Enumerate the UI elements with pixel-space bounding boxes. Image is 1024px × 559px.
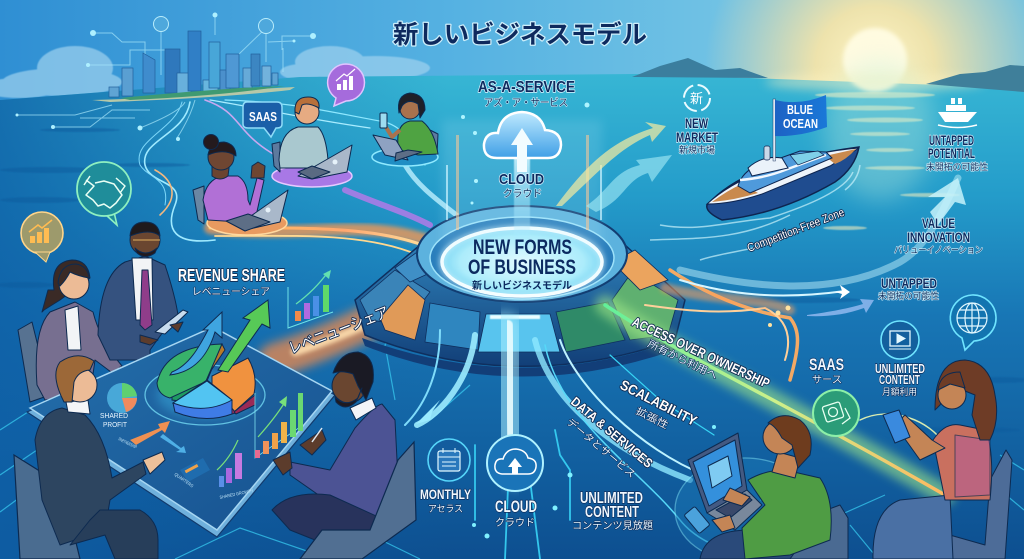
bubble: purple chart icon (328, 64, 364, 106)
label: value innovation: バリューイノベーション (894, 245, 983, 255)
table chart: small bars centre: SHARED GROWTH (219, 488, 253, 500)
person: woman in purple with laptop (193, 134, 288, 235)
blue flows downward (405, 325, 745, 559)
label: revenue share: レベニューシェア (192, 286, 270, 298)
flag: blue ocean (773, 95, 827, 161)
rotated label: data and services: DATA & SERVICES (568, 394, 656, 471)
rotated label: scalability: 拡張性 (634, 404, 671, 432)
arrows rising to new market (556, 122, 672, 212)
table chart: bars right (255, 393, 303, 458)
bubble: growth chart icon, orange (21, 212, 63, 262)
label: untapped: UNTAPPED (881, 275, 937, 291)
label: new market: 新規市場 (679, 144, 715, 155)
flag: blue ocean: BLUE (787, 102, 813, 117)
bubble: handshake icon (77, 162, 131, 225)
icon: new market: 新 (690, 91, 703, 106)
label: rotated revenue share jp: レベニューシェア (286, 304, 391, 358)
title: 新しいビジネスモデル (393, 20, 647, 49)
clouds (0, 46, 430, 98)
label: saas: サース (812, 374, 842, 386)
label: value innovation: INNOVATION (907, 229, 970, 245)
table arrows: PARTNERSHIP (118, 436, 138, 450)
label: unlimited content bottom: UNLIMITED (580, 490, 643, 507)
arrows: value innovation (807, 178, 966, 316)
label: cloud bottom: CLOUD (495, 497, 537, 516)
label: new market (676, 115, 718, 155)
label: untapped (878, 275, 939, 301)
label: new market: NEW (685, 115, 709, 131)
arrow: downward left (416, 400, 440, 424)
label: new market: MARKET (676, 129, 718, 145)
woman with phone in chair (873, 360, 1012, 559)
city island (16, 12, 316, 141)
label: cloud top: クラウド (503, 188, 542, 200)
person: man in sweater with laptop (272, 97, 352, 187)
table chart: small bars centre: QUARTERS (173, 472, 194, 488)
label: untapped: 未開拓の可能性 (878, 290, 939, 301)
label: saas: SAAS (809, 355, 844, 374)
man in green shirt with laptop (684, 416, 848, 559)
network lines (17, 15, 313, 138)
chart: rising bars near revenue share (288, 270, 333, 328)
label: untapped potential: POTENTIAL (928, 145, 975, 161)
man at front left (35, 356, 165, 559)
outer ring (417, 206, 627, 302)
orange stream: revenue share (155, 170, 445, 360)
chair and woman in grey jacket (18, 260, 138, 402)
heading: as-a-service: AS-A-SERVICE (478, 79, 575, 96)
rotated label: access over ownership: ACCESS OVER OWNERSHIP (630, 314, 772, 391)
sun (843, 28, 907, 92)
label: monthly access: アセラス (428, 504, 463, 515)
label: value innovation: VALUE (922, 215, 955, 231)
platform centre label: 新しいビジネスモデル (472, 279, 572, 292)
icon: globe bubble (950, 295, 996, 350)
icon: saas gear badge (813, 390, 859, 436)
table chart: small bars centre (173, 440, 253, 500)
label: unlimited content bottom: CONTENT (585, 504, 639, 521)
icon: cloud upload badge (487, 435, 543, 491)
label: unlimited content, monthly (875, 361, 925, 397)
icon: video bubble (881, 321, 919, 359)
flag: blue ocean: OCEAN (783, 116, 818, 131)
central platform (355, 206, 685, 377)
heading: as-a-service: アズ・ア・サービス (484, 96, 568, 109)
label: monthly access: MONTHLY (420, 486, 471, 502)
table arrows (118, 421, 186, 453)
icon: calendar (428, 439, 470, 481)
rotated label: scalability: SCALABILITY (618, 376, 700, 429)
label: value innovation (894, 215, 983, 255)
man standing with tablet (98, 222, 188, 360)
mountains (632, 58, 768, 78)
label: cloud bottom: クラウド (495, 517, 535, 529)
label: competition-free zone: Competition-Free Zone (746, 207, 846, 255)
platform centre label: NEW FORMS (473, 236, 572, 259)
label: unlimited content, monthly: UNLIMITED (875, 361, 925, 376)
meeting table (27, 327, 335, 537)
label: unlimited content, monthly: 月額利用 (882, 386, 917, 397)
label: cloud top: CLOUD (499, 171, 544, 188)
icon: new market (684, 85, 710, 111)
data streams from city (139, 100, 465, 241)
light beam and column over platform (442, 102, 602, 280)
rotated label: access over ownership: 所有から利用へ (646, 337, 720, 382)
mini pie: shared profit: SHARED (100, 413, 128, 420)
bubble: SAAS (243, 102, 282, 137)
platform centre label: OF BUSINESS (468, 256, 576, 279)
label: untapped potential: 未開拓の可能性 (926, 161, 988, 172)
right chair (300, 442, 416, 559)
label: cloud bottom (495, 497, 537, 529)
mini pie: shared profit: PROFIT (103, 422, 128, 429)
label: saas (809, 355, 844, 386)
buildings (109, 31, 278, 97)
label: unlimited content bottom: コンテンツ見放題 (572, 519, 653, 532)
label: untapped potential (926, 132, 988, 172)
label: revenue share: REVENUE SHARE (178, 265, 285, 285)
floor circuit lines (0, 290, 1024, 559)
heading: as-a-service (478, 79, 575, 109)
pie chart with arrows (157, 300, 270, 419)
icon: ship (938, 98, 977, 128)
platform centre label (468, 236, 576, 292)
man at right (272, 352, 398, 559)
water streaks (0, 128, 1024, 433)
label: unlimited content, monthly: CONTENT (879, 372, 920, 387)
label: untapped potential: UNTAPPED (929, 132, 974, 148)
label: unlimited content bottom (572, 490, 653, 532)
front left chair (14, 455, 80, 559)
sun reflection (815, 92, 960, 230)
label: monthly access (420, 486, 471, 515)
bottom right glow disc (675, 458, 815, 559)
ship with wake (650, 146, 860, 260)
bubble: SAAS: SAAS (249, 110, 277, 124)
cloud icon: as-a-service (484, 112, 561, 172)
person: woman in green with phone (372, 93, 438, 166)
label: cloud top (499, 171, 544, 200)
rotated label: data and services: データとサービス (564, 415, 638, 481)
label: revenue share (178, 265, 285, 298)
green and orange stream: access over ownership (605, 178, 958, 495)
rotated label: access over ownership (630, 314, 772, 391)
platform panels (360, 250, 678, 352)
mini pie: shared profit (100, 383, 137, 429)
